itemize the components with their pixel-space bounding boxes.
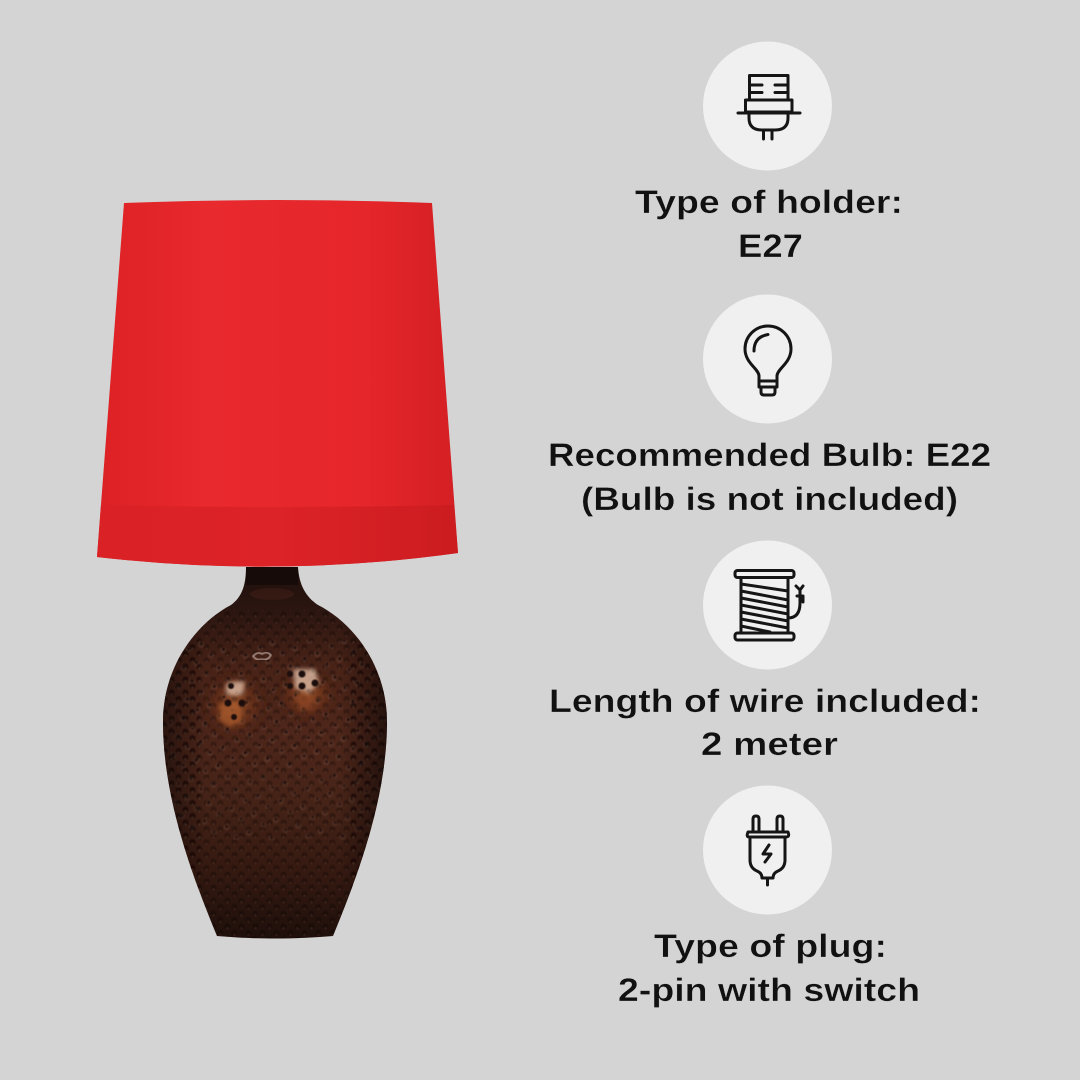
icon: two-pin plug [703,786,832,914]
icon: lamp holder [703,42,832,170]
icon: wire spool [703,540,832,670]
label: length of wire: Length of wire included: [549,683,981,719]
lamp base: hammered bronze vase [160,560,390,945]
label: type of holder: Type of holder: [635,184,903,220]
label: recommended bulb: (Bulb is not included) [581,481,958,517]
lamp photo [97,200,458,945]
icon: light bulb [703,294,832,424]
spec: type of plug [618,786,920,1008]
label: type of plug: 2-pin with switch [618,972,920,1008]
spec: recommended bulb [548,294,991,517]
spec: type of holder [635,42,903,264]
label: length of wire: 2 meter [701,726,838,762]
spec: length of wire [549,540,981,762]
lamp shade [97,200,458,567]
label: type of plug: Type of plug: [654,928,887,964]
label: recommended bulb: Recommended Bulb: E22 [548,437,991,473]
label: type of holder: E27 [738,228,803,264]
